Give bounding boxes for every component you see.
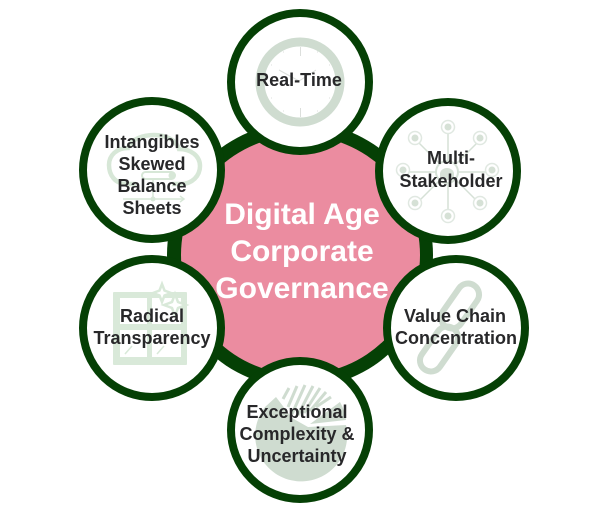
label: exceptional complexity and uncertainty: Uncertainty — [247, 446, 347, 466]
label: multi-stakeholder: Multi- — [427, 148, 475, 168]
icon: clean window — [113, 284, 187, 365]
label: intangibles skewed balance sheets: Balance — [117, 176, 187, 196]
title: Governance — [215, 272, 389, 305]
icon: clock — [260, 42, 340, 122]
label: radical transparency: Radical — [120, 306, 184, 326]
icon: cloud and balance — [109, 135, 200, 202]
panel: exceptional complexity and uncertainty — [231, 361, 369, 499]
icon: pie chart — [255, 385, 347, 481]
label: radical transparency: Transparency — [93, 328, 211, 348]
panel: multi-stakeholder — [379, 102, 517, 240]
label: multi-stakeholder — [399, 148, 503, 191]
label: exceptional complexity and uncertainty: Complexity & — [239, 424, 355, 444]
label: radical transparency — [93, 306, 211, 348]
label: value chain concentration: Concentration — [395, 328, 517, 348]
label: intangibles skewed balance sheets: Intangibles — [104, 132, 200, 152]
label: multi-stakeholder: Stakeholder — [399, 171, 503, 191]
title: Digital Age — [224, 198, 380, 231]
panel: real-time — [231, 13, 369, 151]
title: Corporate — [230, 235, 374, 268]
icon: chain links — [416, 279, 483, 376]
label: value chain concentration — [395, 306, 517, 348]
icon: stakeholder network — [396, 120, 498, 222]
label: real-time: Real-Time — [256, 70, 342, 90]
title — [215, 198, 389, 305]
label: exceptional complexity and uncertainty — [239, 402, 355, 466]
label: intangibles skewed balance sheets — [104, 132, 200, 218]
central hub — [167, 122, 433, 388]
panel: radical transparency — [83, 259, 221, 397]
label: intangibles skewed balance sheets: Sheets — [122, 198, 182, 218]
panel: value chain concentration — [387, 259, 525, 397]
label: exceptional complexity and uncertainty: Exceptional — [246, 402, 348, 422]
label: value chain concentration: Value Chain — [404, 306, 506, 326]
panel: intangibles skewed balance sheets — [83, 101, 221, 239]
label: intangibles skewed balance sheets: Skewed — [118, 154, 186, 174]
